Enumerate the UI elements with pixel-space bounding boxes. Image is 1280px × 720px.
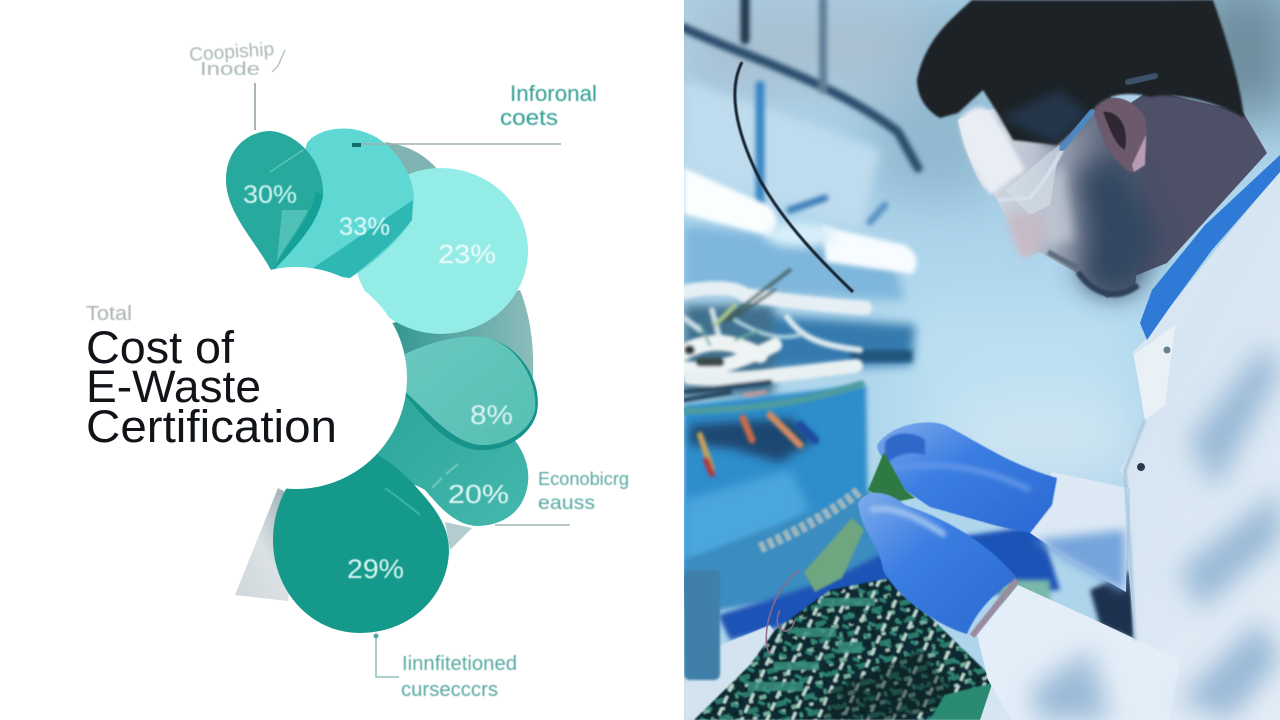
face: nose (1006, 215, 1044, 256)
upper glove: shade (885, 434, 925, 465)
board: dark scatter (820, 650, 960, 720)
coat: upper sleeve (1030, 472, 1128, 592)
percentage: 20%: 20% (448, 479, 509, 509)
technician: hair (917, 0, 1244, 145)
coat: fold shadows (1030, 345, 1280, 720)
bench: left pale surface (684, 625, 780, 720)
technician: safety goggles (1000, 76, 1155, 215)
title block (86, 303, 337, 452)
label: right lower: Econobicrg (538, 469, 629, 489)
segment: 29% deep teal circle (273, 440, 449, 633)
label: top left (189, 39, 275, 79)
coat: white inner panel (1134, 325, 1175, 420)
wires: bundle on rack (684, 270, 865, 474)
rack: lighter lower panel (684, 470, 810, 562)
technician: upper glove (877, 422, 1057, 533)
label: right lower (538, 469, 629, 514)
face: lit forehead (959, 107, 1025, 195)
label: bottom: Iinnfitetioned (402, 653, 517, 675)
dark gap behind coat (1090, 570, 1135, 640)
rack: dark shelf shadow (850, 350, 912, 362)
label: bottom (401, 653, 517, 701)
overline: Total: Total (86, 303, 132, 325)
hair: soft teal sheen (1000, 90, 1090, 145)
label: informal costs: Inforonal (510, 81, 597, 106)
icon: tick mark (272, 50, 285, 72)
bench: blue container (684, 570, 720, 680)
leader: informal costs line (352, 143, 561, 145)
percentage: 23%: 23% (438, 239, 496, 269)
lower glove: knuckle highlight (870, 509, 945, 535)
label: top left: Coopiship (189, 39, 275, 66)
bench: pale striped cable (760, 490, 860, 548)
green board held up (804, 518, 864, 592)
circuit board on bench (694, 578, 1000, 720)
bench: blue equipment (684, 490, 890, 610)
board: upper chips (748, 598, 875, 691)
back arc: right grey-teal band (385, 290, 533, 410)
upper glove: finger highlight (890, 465, 1030, 490)
technician: neck (1090, 90, 1267, 290)
percentage: 30%: 30% (243, 181, 297, 209)
back arc: upper grey-teal band (385, 142, 438, 190)
light: left fluorescent tube (684, 168, 777, 236)
technician: face (958, 95, 1145, 298)
segment: 20% teal lobe (340, 360, 528, 526)
coat: lower button (1137, 463, 1145, 471)
bench: dark blue strip (718, 525, 1060, 640)
back wedge: lower grey shadow (235, 488, 300, 601)
segment: 8% soft teal lobe (405, 336, 538, 450)
coat: blue collar (1140, 155, 1280, 340)
light: glow (765, 223, 835, 247)
label: bottom: cursecccrs (401, 679, 498, 701)
rack: dark shelf band (760, 315, 915, 370)
rack: dark left mass (684, 305, 774, 395)
rack: dark underside (690, 418, 815, 462)
segment: 20% gloss ticks (432, 464, 458, 488)
wrist: band (972, 580, 1017, 636)
green board between fingers (868, 452, 915, 503)
label: top left: Inode (200, 59, 260, 79)
leader: right-lower label line (495, 524, 570, 526)
back wedge: lower right band (445, 522, 472, 550)
leader: bottom arrow tip (374, 634, 378, 638)
label: right lower: eauss (538, 493, 595, 514)
coat: button (1164, 346, 1170, 354)
percentage: 29%: 29% (347, 554, 404, 584)
technician: lower glove (858, 493, 1017, 634)
wire: black cable (735, 62, 853, 292)
face: cheek (1025, 165, 1075, 245)
technician: ear (1093, 98, 1147, 172)
segment: 33% teal lobe (272, 128, 414, 278)
heading: line 1: Cost of (86, 322, 235, 373)
rack: blue lower body (684, 385, 868, 595)
thin red wires (766, 570, 800, 655)
rack: blue upper shelf (684, 225, 905, 300)
leader: dot on 33% lobe (352, 143, 361, 147)
heading: line 2: E-Waste (86, 361, 261, 412)
board: green corner (931, 683, 992, 720)
leader: bottom label elbow (376, 637, 399, 677)
coat: lower sleeve (977, 585, 1148, 720)
light: right fluorescent tube (822, 226, 917, 274)
coat: front edge shadow (1125, 420, 1145, 640)
face: moustache (1048, 252, 1078, 268)
label: informal costs: coets (500, 105, 558, 130)
face: jaw beard edge (1078, 272, 1138, 294)
segment: 23% light circle (354, 168, 528, 334)
photo background (684, 0, 1280, 720)
technician: coat (980, 170, 1280, 720)
heading: line 3: Certification (86, 401, 337, 452)
percentage: 33%: 33% (339, 213, 390, 241)
wall: top left pale panel (684, 80, 880, 230)
panel: cost breakdown chart (86, 39, 629, 701)
percentage: 8%: 8% (470, 400, 513, 430)
segment: 29% gloss line (385, 488, 420, 515)
leader: top-left label line (254, 83, 256, 130)
face: beard shadow (1075, 150, 1160, 295)
label: informal costs (500, 81, 597, 130)
upper sleeve: blue shade (1035, 530, 1125, 592)
panel: photo of technician inspecting circuit board (684, 0, 1280, 720)
centre white circle (185, 267, 407, 489)
segment: 30% heart drop (226, 131, 323, 272)
background soft tones (684, 0, 1280, 480)
green surface behind hands (1000, 580, 1050, 604)
rack: upper frame (684, 0, 918, 222)
